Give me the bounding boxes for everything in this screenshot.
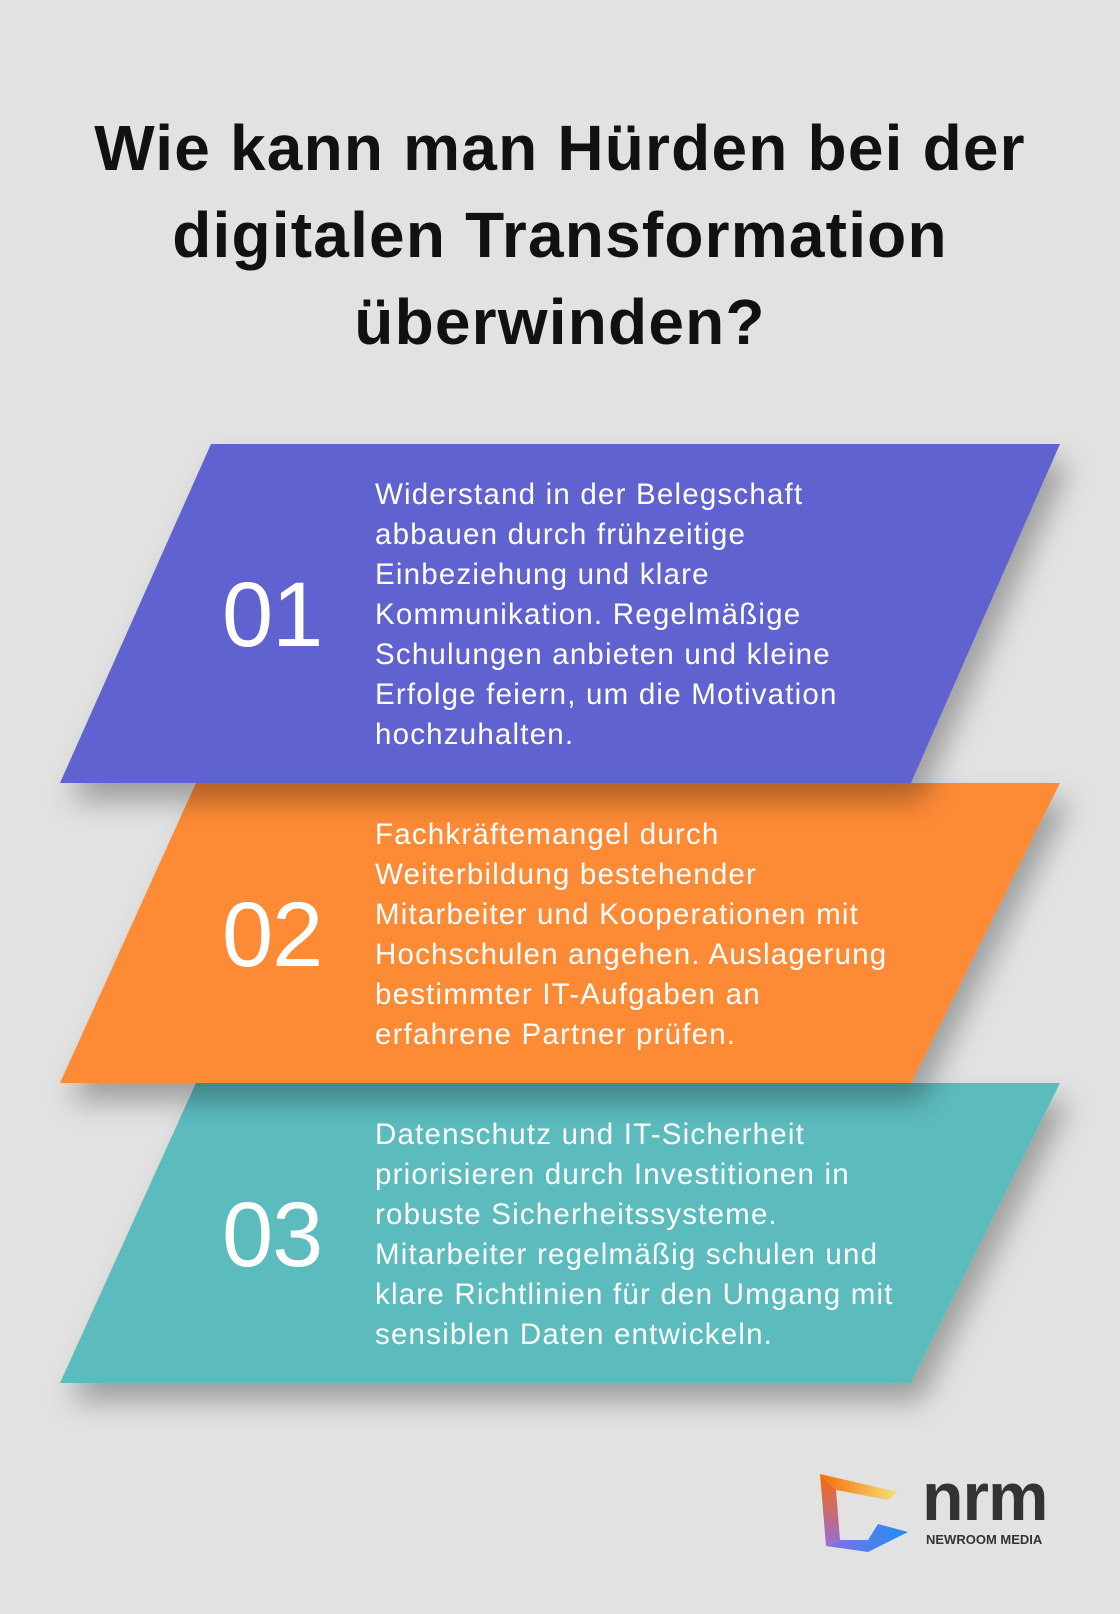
logo: NEWROOM MEDIA <box>926 1532 1042 1547</box>
text 03: Datenschutz und IT-Sicherheit priorisieren durch Investitionen in robuste Sicherheitssysteme. Mitarbeiter regelmäßig schulen und klare Richtlinien für den Umgang mit sensiblen Daten entwickeln. <box>375 1118 894 1351</box>
logo <box>820 1459 1047 1552</box>
title <box>94 112 1026 358</box>
icon: logo mark <box>820 1474 908 1552</box>
title: digitalen Transformation <box>172 199 948 271</box>
number 02: 02 <box>222 884 322 986</box>
title: Wie kann man Hürden bei der <box>94 112 1026 184</box>
panel 3 shape <box>60 1083 1060 1383</box>
logo text: nrm <box>922 1459 1047 1535</box>
title: überwinden? <box>354 286 766 358</box>
number 01: 01 <box>222 564 322 666</box>
number 03: 03 <box>222 1184 322 1286</box>
text 02: Fachkräftemangel durch Weiterbildung bestehender Mitarbeiter und Kooperationen mit Hochschulen angehen. Auslagerung bestimmter IT-Aufgaben an erfahrene Partner prüfen. <box>375 818 887 1051</box>
panel 2 shape <box>60 783 1060 1083</box>
text 01: Widerstand in der Belegschaft abbauen durch frühzeitige Einbeziehung und klare Kommunikation. Regelmäßige Schulungen anbieten und kleine Erfolge feiern, um die Motivation hochzuhalten. <box>375 478 838 751</box>
panel 1 shape <box>60 444 1060 783</box>
